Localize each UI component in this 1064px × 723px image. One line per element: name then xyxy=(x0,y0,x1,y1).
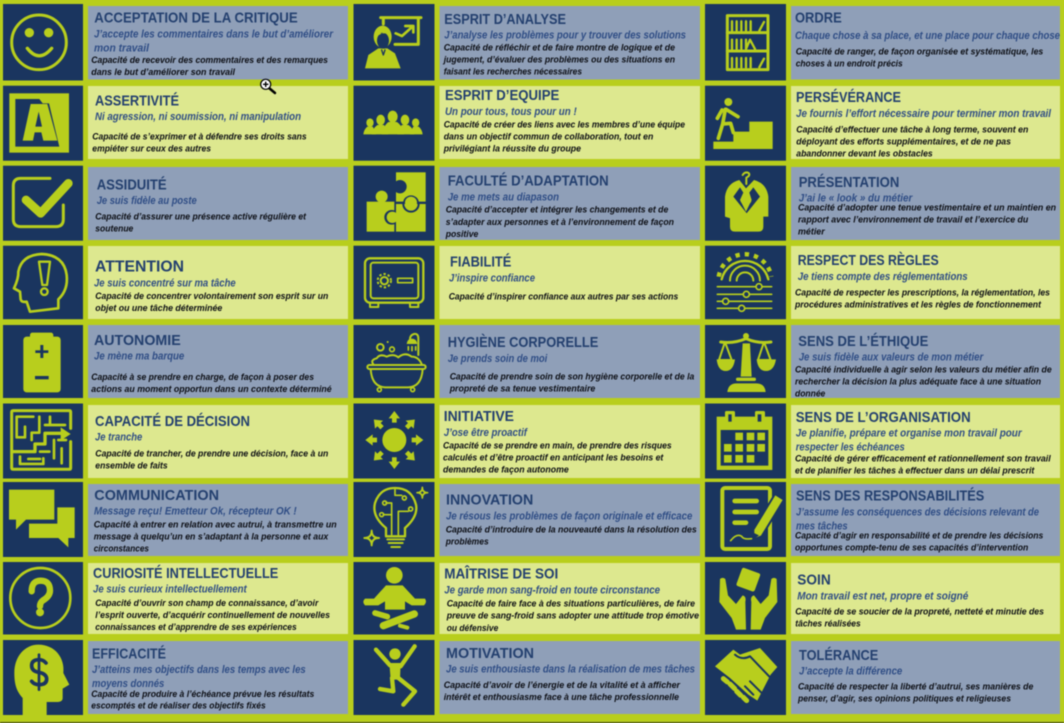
panel background xyxy=(88,563,348,634)
tagline: Message reçu! Emetteur Ok, récepteur OK ! xyxy=(94,506,297,518)
description xyxy=(91,55,328,77)
description: métier xyxy=(798,226,825,236)
panel background xyxy=(88,167,348,240)
description xyxy=(95,291,329,313)
panel: Communication xyxy=(3,482,348,557)
panel background xyxy=(88,6,348,80)
panel background xyxy=(791,405,1060,478)
description: Capacité individuelle à agir selon les valeurs du métier afin de xyxy=(795,364,1052,374)
panel background xyxy=(440,6,700,80)
icon: calendar xyxy=(705,404,786,478)
heading: INITIATIVE xyxy=(444,408,514,425)
description: et de planifier les tâches à effectuer dans un délai prescrit xyxy=(795,466,1035,476)
tagline: Ni agression, ni soumission, ni manipulation xyxy=(95,111,301,123)
description xyxy=(796,125,1029,159)
description: l’esprit ouverte, d’acquérir continuellement de nouvelles xyxy=(95,610,330,620)
panel: Esprit d'équipe xyxy=(354,86,700,161)
description xyxy=(794,288,1050,310)
panel background xyxy=(88,484,348,556)
heading: COMMUNICATION xyxy=(94,487,219,504)
description xyxy=(795,364,1052,398)
icon: jumping person xyxy=(354,640,434,715)
tagline: Je tiens compte des réglementations xyxy=(798,271,968,283)
description xyxy=(445,205,674,239)
description xyxy=(444,680,680,702)
panel: Faculté d'adaptation xyxy=(354,166,700,241)
description: actions au moment opportun dans un contexte déterminé xyxy=(91,384,332,394)
tagline: J’analyse les problèmes pour y trouver des solutions xyxy=(444,30,686,42)
icon: signed document and pencil xyxy=(705,482,786,557)
description xyxy=(796,46,1043,68)
description xyxy=(449,371,694,394)
panel background xyxy=(440,484,700,556)
panel: Motivation xyxy=(354,640,700,715)
description xyxy=(795,607,1044,629)
tagline xyxy=(796,428,1022,454)
panel: Efficacité xyxy=(3,640,348,715)
icon: checkbox xyxy=(3,166,83,241)
icon: scales of justice xyxy=(705,325,786,398)
icon: puzzle pieces xyxy=(354,166,434,241)
description: Capacité de réfléchir et de faire montre de logique et de xyxy=(444,42,675,52)
description xyxy=(91,372,332,394)
description: Capacité de ranger, de façon organisée et systématique, les xyxy=(796,46,1043,56)
heading: SENS DE L’ORGANISATION xyxy=(796,409,971,426)
description: escomptés et de réaliser des objectifs fixés xyxy=(91,701,266,711)
description xyxy=(446,598,699,633)
panel: Fiabilité xyxy=(354,246,700,319)
description: privilégiant la réussite du groupe xyxy=(443,144,581,154)
description: Capacité de respecter les prescriptions, la réglementation, les xyxy=(795,288,1050,298)
description xyxy=(95,212,307,234)
icon: team of people xyxy=(354,86,434,161)
tagline: Je planifie, prépare et organise mon travail pour xyxy=(796,428,1022,440)
tagline: J’inspire confiance xyxy=(449,273,535,285)
heading: ESPRIT D’EQUIPE xyxy=(445,87,559,104)
panel background xyxy=(440,246,700,319)
description: rapport avec l’environnement de travail et l’exercice du xyxy=(798,214,1029,224)
description: dans le but d’améliorer son travail xyxy=(91,67,235,77)
description: objet ou une tâche déterminée xyxy=(95,303,222,313)
heading: HYGIÈNE CORPORELLE xyxy=(448,334,598,351)
description: Capacité d’accepter et intégrer les changements et de xyxy=(446,205,668,215)
heading: INNOVATION xyxy=(446,492,533,509)
icon: head with suit on hanger xyxy=(705,166,786,241)
tagline: mes tâches xyxy=(796,520,848,532)
icon: head with exclamation mark xyxy=(3,246,83,319)
tagline xyxy=(796,506,1039,532)
icon: meditating person xyxy=(354,562,434,634)
heading: TOLÉRANCE xyxy=(799,647,878,664)
panel background xyxy=(791,86,1060,159)
panel: Tolérance xyxy=(705,640,1060,715)
icon: bookshelf xyxy=(705,4,786,80)
description: Capacité de concentrer volontairement son esprit sur un xyxy=(95,291,329,301)
tagline: J’accepte la différence xyxy=(799,666,902,678)
heading: MOTIVATION xyxy=(446,645,534,662)
description xyxy=(795,454,1051,476)
panel: Attention xyxy=(3,246,348,319)
panel: Sens des responsabilités xyxy=(705,482,1060,557)
description: preuve de sang-froid sans adopter une attitude trop émotive xyxy=(446,610,699,620)
tagline: Mon travail est net, propre et soigné xyxy=(797,590,968,602)
description: Capacité de s’exprimer et à défendre ses droits sans xyxy=(92,131,307,141)
description xyxy=(798,202,1056,236)
description xyxy=(91,689,314,711)
heading: ESPRIT D’ANALYSE xyxy=(444,11,566,28)
icon: gear with sliders xyxy=(705,246,786,319)
tagline: moyens donnés xyxy=(92,678,164,690)
panel background xyxy=(88,641,348,714)
description: soutenue xyxy=(95,224,133,234)
description: procédures administratives et les règles de fonctionnement xyxy=(794,300,1042,310)
tagline: Je suis curieux intellectuellement xyxy=(93,583,248,595)
panel background xyxy=(440,325,700,398)
panel: Capacité de décision xyxy=(3,404,348,478)
description: Capacité de produire à l’échéance prévue les résultats xyxy=(91,689,314,699)
heading: ASSERTIVITÉ xyxy=(95,92,179,109)
description: faisant les recherches nécessaires xyxy=(444,66,582,76)
panel: Respect des règles xyxy=(705,246,1060,319)
description: Capacité d’assurer une présence active régulière et xyxy=(95,212,307,222)
heading: AUTONOMIE xyxy=(94,332,181,349)
panel: Innovation xyxy=(354,482,700,557)
description: Capacité de gérer efficacement et rationnellement son travail xyxy=(795,454,1051,464)
heading: SENS DES RESPONSABILITÉS xyxy=(796,487,984,504)
description: connaissances et d’apprendre de ses expériences xyxy=(95,622,297,632)
description: Capacité de se soucier de la propreté, netteté et minutie des xyxy=(795,607,1044,617)
description: Capacité d’avoir de l’énergie et de la vitalité et à afficher xyxy=(444,680,680,690)
heading: PRÉSENTATION xyxy=(799,174,899,191)
description: s’adapter aux personnes et à l’environnement de façon xyxy=(446,217,674,227)
description xyxy=(95,449,329,471)
panel background xyxy=(440,405,700,478)
panel: Esprit d'analyse xyxy=(354,4,700,80)
description: calculés et d’être proactif en anticipant les besoins et xyxy=(443,452,664,462)
description: Capacité à se prendre en charge, de façon à poser des xyxy=(91,372,314,382)
heading: SENS DE L’ÉTHIQUE xyxy=(798,333,928,350)
description: Capacité de se prendre en main, de prendre des risques xyxy=(443,440,672,450)
panel background xyxy=(88,405,348,478)
icon: battery xyxy=(3,325,83,398)
tagline: J’ai le « look » du métier xyxy=(799,193,913,205)
description: choses à un endroit précis xyxy=(796,58,903,68)
panel: Assiduité xyxy=(3,166,348,241)
description: Capacité à entrer en relation avec autrui, à transmettre un xyxy=(94,519,337,529)
icon: handshake xyxy=(705,640,786,715)
icon: smiley xyxy=(3,4,83,80)
heading: MAÎTRISE DE SOI xyxy=(444,565,558,583)
icon: question mark in circle xyxy=(3,562,83,634)
description: Capacité de recevoir des commentaires et des remarques xyxy=(91,55,328,65)
heading: CAPACITÉ DE DÉCISION xyxy=(95,413,250,430)
icon: presenter at board xyxy=(354,4,434,80)
description: Capacité d’ouvrir son champ de connaissance, d’avoir xyxy=(95,598,319,608)
description: dans un objectif commun de collaboration, tout en xyxy=(444,132,654,142)
icon: maze with arrow xyxy=(3,404,83,478)
tagline: Je mène ma barque xyxy=(94,350,184,362)
icon: person climbing stairs xyxy=(705,86,786,161)
panel: Assertivité xyxy=(3,86,348,161)
panel background xyxy=(791,484,1060,556)
description: Capacité de prendre soin de son hygiène corporelle et de la xyxy=(450,371,694,381)
heading: FIABILITÉ xyxy=(450,254,511,271)
tagline: J’ose être proactif xyxy=(444,427,528,439)
panel background xyxy=(440,563,700,634)
icon: safe xyxy=(354,246,434,319)
panel: Ordre xyxy=(705,4,1060,80)
description: opportunes compte-tenu de ses capacités d’intervention xyxy=(795,542,1029,552)
description: donnée xyxy=(795,388,825,398)
heading: ASSIDUITÉ xyxy=(97,176,167,193)
tagline: Je résous les problèmes de façon originale et efficace xyxy=(446,511,692,523)
description xyxy=(795,530,1043,552)
heading: CURIOSITÉ INTELLECTUELLE xyxy=(93,565,278,582)
panel: Présentation xyxy=(705,166,1060,241)
tagline: Je tranche xyxy=(95,432,142,444)
panel: Soin xyxy=(705,562,1060,634)
tagline: Un pour tous, tous pour un ! xyxy=(445,106,577,118)
description: déployant des efforts supplémentaires, et de ne pas xyxy=(796,137,1011,147)
description: penser, d’agir, ses opinions politiques et religieuses xyxy=(797,693,1011,703)
icon: bathtub xyxy=(354,325,434,398)
description xyxy=(95,598,330,632)
panel background xyxy=(440,641,700,714)
panel background xyxy=(440,167,700,240)
heading: FACULTÉ D’ADAPTATION xyxy=(448,173,609,190)
tagline xyxy=(94,29,334,55)
description: intérêt et enthousiasme face à une tâche professionnelle xyxy=(444,692,679,702)
panel: Maîtrise de soi xyxy=(354,562,700,634)
panel background xyxy=(88,246,348,319)
description xyxy=(92,131,307,153)
description: problèmes xyxy=(445,536,489,546)
description: tâches réalisées xyxy=(795,619,861,629)
description: Capacité d’agir en responsabilité et de prendre les décisions xyxy=(795,530,1043,540)
tagline: Je suis concentré sur ma tâche xyxy=(94,278,236,290)
tagline: Je suis enthousiaste dans la réalisation de mes tâches xyxy=(446,664,695,676)
description xyxy=(94,519,337,553)
heading: ORDRE xyxy=(795,10,842,27)
description: Capacité de respecter la liberté d’autrui, ses manières de xyxy=(798,681,1033,691)
panel background xyxy=(88,86,348,159)
description: Capacité d’introduire de la nouveauté dans la résolution des xyxy=(446,524,697,534)
description: rechercher la décision la plus adéquate face à une situation xyxy=(795,376,1041,386)
description xyxy=(443,42,675,76)
description: ou défensive xyxy=(447,623,498,633)
tagline: Je suis fidèle au poste xyxy=(97,195,197,207)
description: circonstances xyxy=(94,543,149,553)
icon: speech bubbles xyxy=(3,482,83,557)
description xyxy=(443,440,672,474)
description xyxy=(443,120,685,154)
tagline: J’accepte les commentaires dans le but d’améliorer xyxy=(94,29,334,41)
tagline: Je me mets au diapason xyxy=(448,192,559,204)
icon: light bulb xyxy=(354,482,434,557)
tagline: J’atteins mes objectifs dans les temps avec les xyxy=(92,664,306,676)
tagline: Je suis fidèle aux valeurs de mon métier xyxy=(799,352,984,364)
panel: Acceptation de la critique xyxy=(3,4,348,80)
panel: Curiosité intellectuelle xyxy=(3,562,348,634)
description: message à quelqu’un en s’adaptant à la personne et aux xyxy=(94,531,329,541)
description: Capacité d’inspirer confiance aux autres par ses actions xyxy=(449,291,678,301)
tagline: respecter les échéances xyxy=(796,442,905,454)
heading: RESPECT DES RÈGLES xyxy=(798,252,939,269)
panel background xyxy=(791,167,1060,240)
panel: Sens de l'éthique xyxy=(705,325,1060,398)
description: Capacité d’effectuer une tâche à long terme, souvent en xyxy=(796,125,1029,135)
description: propreté de sa tenue vestimentaire xyxy=(449,384,595,394)
description: Capacité d’adopter une tenue vestimentaire et un maintien en xyxy=(798,202,1056,212)
icon: head with dollar sign xyxy=(3,640,83,715)
description: empiéter sur ceux des autres xyxy=(92,143,211,153)
panel background xyxy=(791,246,1060,319)
heading: EFFICACITÉ xyxy=(92,645,166,662)
heading: ACCEPTATION DE LA CRITIQUE xyxy=(94,10,298,27)
panel background xyxy=(791,563,1060,634)
panel background xyxy=(791,325,1060,398)
panel background xyxy=(791,641,1060,714)
description: Capacité de créer des liens avec les membres d’une équipe xyxy=(444,120,685,130)
description xyxy=(797,681,1033,703)
panel: Sens de l'organisation xyxy=(705,404,1060,478)
panel: Initiative xyxy=(354,404,700,478)
panel background xyxy=(88,325,348,398)
heading: PERSÉVÉRANCE xyxy=(796,89,901,106)
description: Capacité de trancher, de prendre une décision, face à un xyxy=(95,449,329,459)
tagline xyxy=(92,664,306,690)
icon: magnifier cursor xyxy=(261,79,275,93)
description: ensemble de faits xyxy=(95,461,168,471)
panel background xyxy=(440,86,700,159)
description: demandes de façon autonome xyxy=(443,464,569,474)
icon: radiating arrows xyxy=(354,404,434,478)
description: positive xyxy=(445,229,478,239)
panel: Hygiène corporelle xyxy=(354,325,700,398)
panel: Persévérance xyxy=(705,86,1060,161)
tagline: Je garde mon sang-froid en toute circonstance xyxy=(444,585,660,597)
panel background xyxy=(791,6,1060,80)
description: Capacité de faire face à des situations particulières, de faire xyxy=(447,598,695,608)
description: abandonner devant les obstacles xyxy=(796,149,933,159)
heading: SOIN xyxy=(797,572,831,589)
panel: Autonomie xyxy=(3,325,348,398)
description xyxy=(445,524,697,546)
tagline: mon travail xyxy=(94,43,150,55)
icon: letter A xyxy=(3,86,83,161)
heading: ATTENTION xyxy=(95,259,184,276)
icon: hands holding a cube xyxy=(705,562,786,634)
tagline: Je prends soin de moi xyxy=(448,353,548,365)
description: jugement, d’évaluer des problèmes ou des situations en xyxy=(443,54,675,64)
